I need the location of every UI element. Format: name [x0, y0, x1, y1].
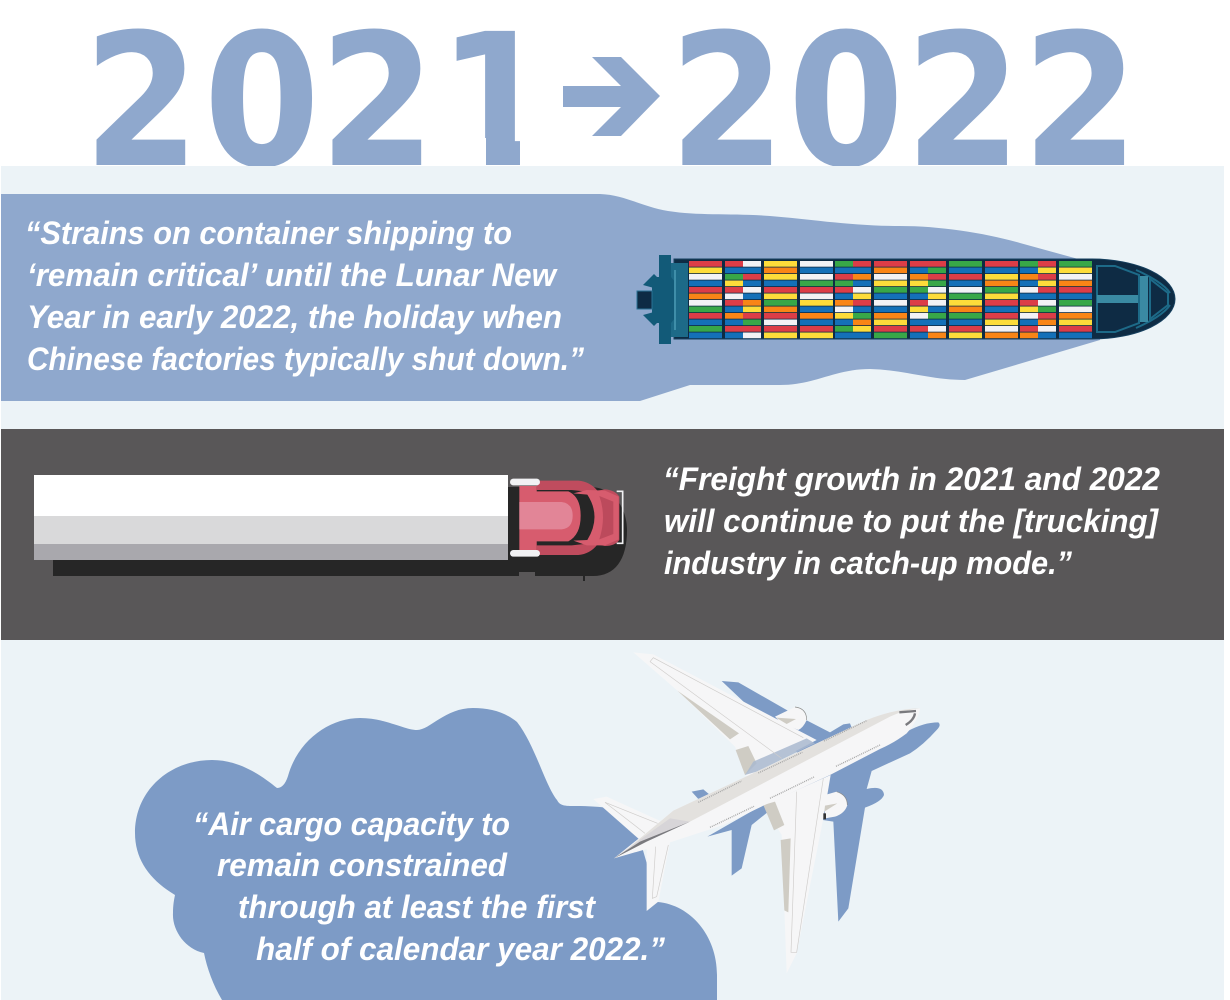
panel: cloud with quote	[135, 708, 717, 1000]
plane tail fin	[614, 818, 690, 858]
ship hull	[674, 259, 1175, 339]
ship quote	[25, 215, 584, 377]
plane upper wing	[633, 652, 817, 777]
icon: airplane	[593, 652, 940, 973]
ship wake	[1, 194, 1100, 401]
title arrow	[563, 57, 660, 136]
ship quote: Year in early 2022, the holiday when	[27, 299, 562, 335]
plane tail stabilizers	[593, 797, 670, 911]
ship quote: “Strains on container shipping to	[25, 215, 512, 251]
truck quote: will continue to put the [trucking]	[664, 503, 1159, 539]
plane windows	[698, 720, 880, 827]
plane cockpit	[899, 711, 916, 725]
air quote: through at least the first	[238, 889, 596, 925]
band: sky background	[1, 640, 1224, 1000]
truck quote	[663, 461, 1160, 581]
title year 2021: 2021	[83, 0, 554, 209]
title year 2022: 2022	[669, 0, 1139, 209]
plane flaps	[677, 691, 791, 912]
ship bow deck	[1097, 266, 1170, 332]
containers	[689, 261, 1092, 338]
panel: ship wake shape with quote	[1, 194, 1100, 401]
cloud	[135, 708, 717, 1000]
ship quote: Chinese factories typically shut down.”	[27, 341, 584, 377]
plane wing lines	[605, 658, 823, 952]
plane lower wing	[763, 775, 831, 973]
plane fuselage top shade	[630, 708, 920, 847]
band: road background	[1, 429, 1224, 640]
icon: container ship	[637, 255, 1175, 344]
trailer	[34, 475, 508, 560]
air quote: remain constrained	[217, 847, 508, 883]
plane shadow	[692, 681, 940, 922]
air quote	[193, 806, 665, 967]
ship bow grid	[1140, 276, 1148, 322]
band: ocean background	[1, 166, 1224, 429]
plane engines	[775, 707, 847, 819]
plane fuselage	[614, 708, 920, 858]
ship quote: ‘remain critical’ until the Lunar New	[27, 257, 558, 293]
truck cab	[510, 479, 623, 557]
truck quote: “Freight growth in 2021 and 2022	[663, 461, 1160, 497]
air quote: half of calendar year 2022.”	[256, 931, 665, 967]
plane wing root tint	[745, 738, 815, 775]
truck shadow	[53, 487, 627, 576]
icon: truck	[34, 475, 627, 581]
air quote: “Air cargo capacity to	[193, 806, 510, 842]
ship bow hatch	[1097, 295, 1138, 303]
ship stern superstructure	[637, 255, 688, 344]
title	[83, 0, 1139, 209]
truck quote: industry in catch-up mode.”	[664, 545, 1072, 581]
